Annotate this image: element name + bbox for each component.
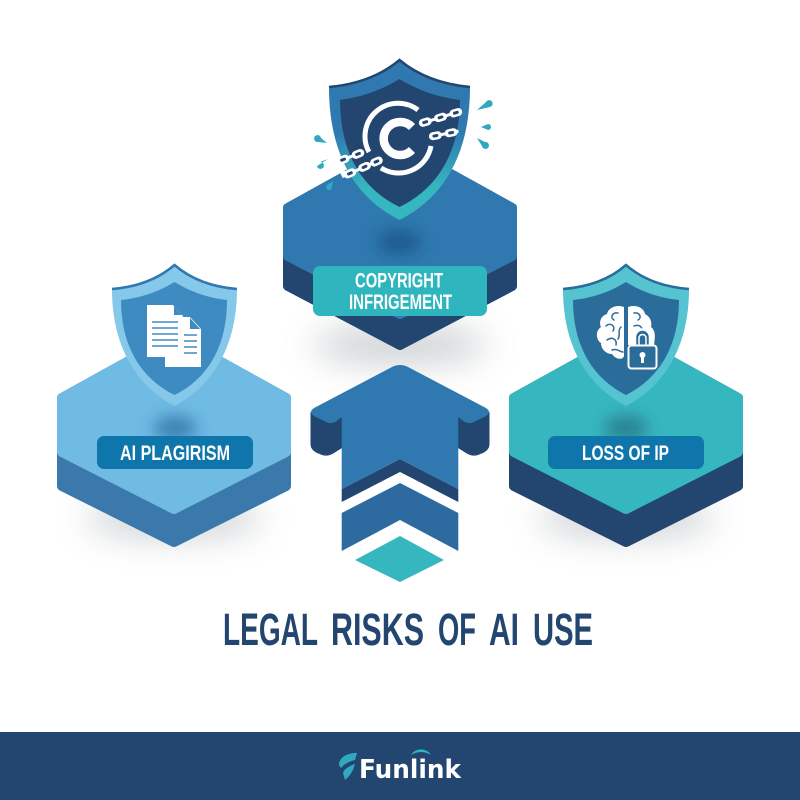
title: AI xyxy=(489,604,519,655)
label: copyright infrigement: INFRIGEMENT xyxy=(349,291,452,314)
hexagon base: copyright xyxy=(288,146,512,345)
icon: copyright symbol xyxy=(365,103,431,173)
icon: documents xyxy=(147,305,201,367)
footer band xyxy=(0,732,800,800)
hexagon base: loss of ip xyxy=(514,336,738,542)
label: ai plagirism: AI PLAGIRISM xyxy=(120,442,230,465)
shield: loss of ip xyxy=(563,265,689,406)
shield: copyright xyxy=(329,60,470,220)
label: copyright infrigement: COPYRIGHT xyxy=(355,270,443,292)
arrow: upward stacked arrow xyxy=(310,365,490,582)
title xyxy=(223,604,593,655)
label: loss of ip: LOSS OF IP xyxy=(582,442,669,465)
label: loss of ip xyxy=(548,436,704,469)
label: copyright infrigement xyxy=(313,266,487,316)
logo wordmark: Funlink xyxy=(359,755,462,785)
label: ai plagirism xyxy=(97,436,253,469)
icon: broken chains xyxy=(336,107,463,180)
title: USE xyxy=(533,604,593,655)
panel: copyright infringement xyxy=(288,60,512,345)
panel: loss of ip xyxy=(514,265,738,542)
icon: funlink logo mark xyxy=(339,749,431,780)
ground shadows xyxy=(86,325,714,538)
panel: ai plagiarism xyxy=(62,265,286,542)
icon: teal droplets xyxy=(314,100,493,190)
title: RISKS xyxy=(331,604,424,655)
shield: plagiarism xyxy=(112,265,237,406)
icon: brain with lock xyxy=(597,306,656,368)
hexagon base: plagiarism xyxy=(62,336,286,542)
title: LEGAL xyxy=(223,604,318,655)
title: OF xyxy=(438,604,476,655)
